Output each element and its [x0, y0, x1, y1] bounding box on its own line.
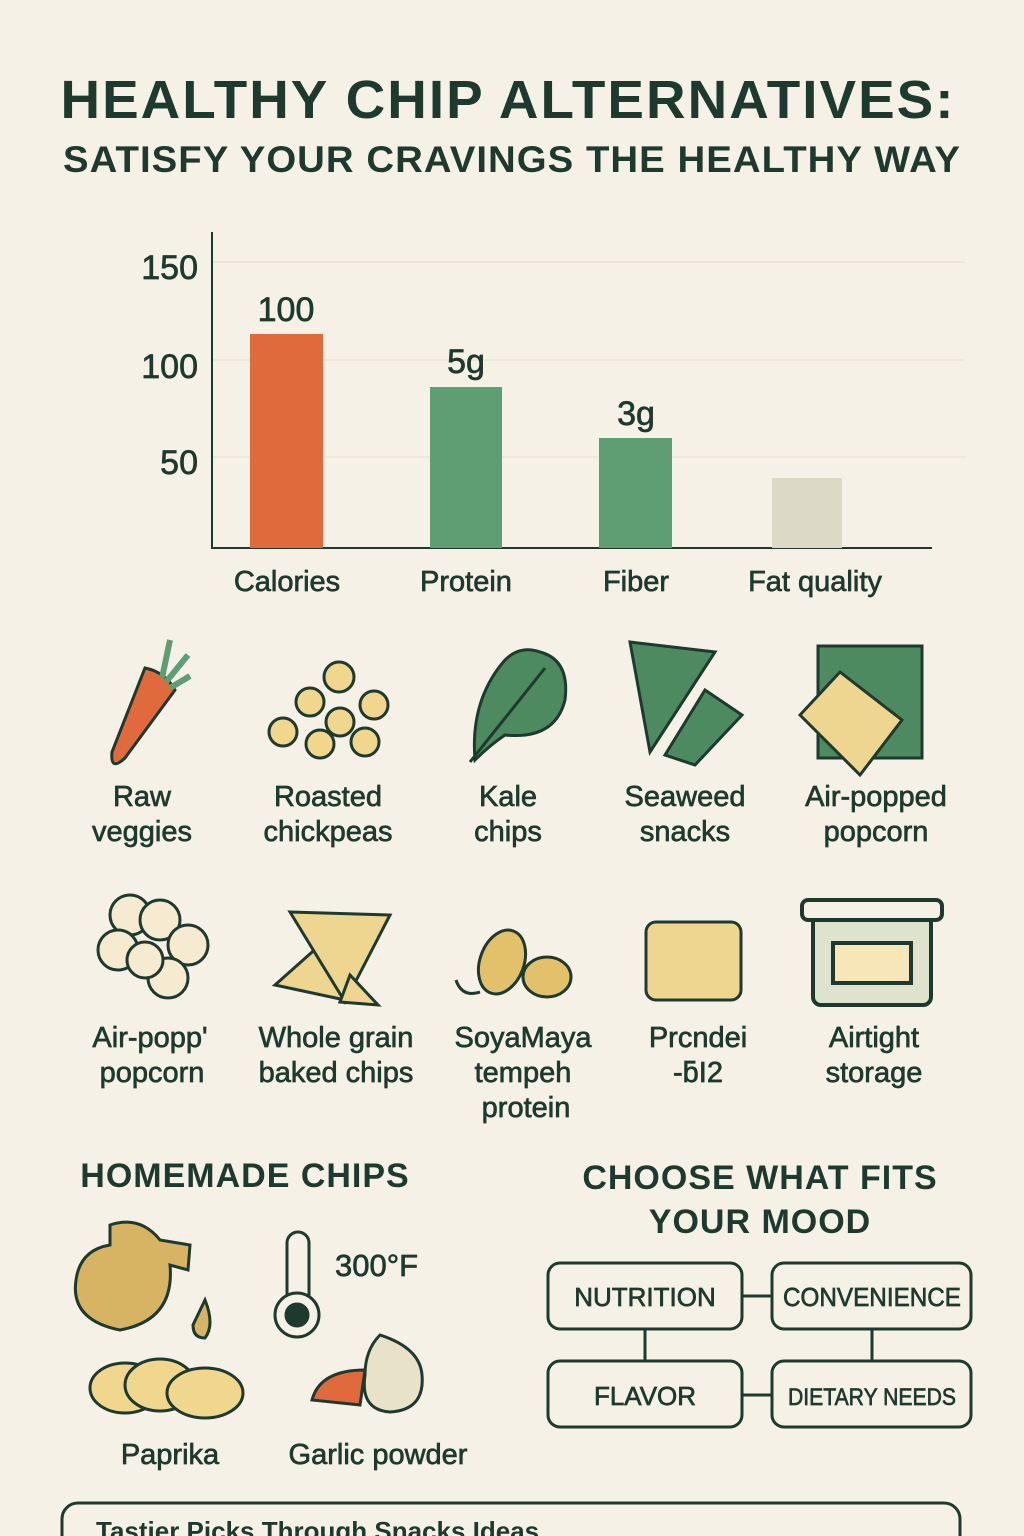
decision grid: FLAVOR — [594, 1381, 696, 1411]
labels row 1: veggies — [92, 816, 192, 848]
bar chart — [141, 232, 965, 598]
bar chart: Fat quality — [748, 566, 882, 598]
labels row 2 — [92, 1022, 922, 1124]
labels row 2: baked chips — [259, 1057, 413, 1089]
icon: oil jug — [75, 1222, 210, 1338]
bar chart: 100 — [258, 291, 314, 329]
title: HEALTHY CHIP ALTERNATIVES: — [60, 70, 956, 130]
labels row 2: Whole grain — [259, 1022, 413, 1054]
labels row 1: chickpeas — [264, 816, 392, 848]
decision grid: NUTRITION — [574, 1282, 716, 1312]
bar chart: Calories — [234, 566, 340, 598]
icon: popcorn cloud — [98, 895, 208, 998]
labels: spices — [121, 1439, 468, 1471]
labels row 2: Air-popp' — [92, 1022, 208, 1054]
icon: tempeh — [456, 923, 571, 1001]
decision grid: CONVENIENCE — [783, 1282, 961, 1312]
bar chart: 100 — [141, 348, 198, 386]
bar chart: Protein — [420, 566, 512, 598]
labels row 1: popcorn — [824, 816, 928, 848]
icon: garlic and pepper — [312, 1335, 422, 1412]
labels row 1: Air-popped — [805, 781, 947, 813]
labels row 2: protein — [482, 1092, 570, 1124]
labels: spices: Paprika — [121, 1439, 220, 1471]
labels row 2: Prcndei — [649, 1022, 747, 1054]
labels row 1: Raw — [113, 781, 172, 813]
labels row 2: popcorn — [100, 1057, 204, 1089]
bar chart: 5g — [447, 343, 485, 381]
labels row 1: Seaweed — [625, 781, 745, 813]
icon: carrot — [112, 640, 190, 764]
bar chart: Fiber — [603, 566, 669, 598]
labels row 1: chips — [474, 816, 542, 848]
icon: popcorn square — [800, 646, 922, 775]
heading: homemade chips: HOMEMADE CHIPS — [80, 1157, 410, 1195]
icon: cracker — [646, 922, 741, 1000]
icon: seaweed — [630, 642, 742, 765]
labels: spices: Garlic powder — [289, 1439, 468, 1471]
decision grid: DIETARY NEEDS — [788, 1384, 956, 1411]
labels row 1 — [92, 781, 947, 848]
decision grid — [548, 1263, 971, 1427]
icon: chickpeas — [269, 662, 388, 758]
labels row 2: -ƃI2 — [673, 1057, 723, 1089]
labels row 1: snacks — [640, 816, 730, 848]
labels row 2: SoyaMaya — [454, 1022, 592, 1054]
labels row 2: tempeh — [475, 1057, 571, 1089]
labels row 1: Kale — [479, 781, 537, 813]
heading: choose mood: YOUR MOOD — [649, 1203, 871, 1241]
title: SATISFY YOUR CRAVINGS THE HEALTHY WAY — [63, 139, 961, 180]
icon: thermometer — [275, 1232, 319, 1337]
labels row 2: storage — [826, 1057, 922, 1089]
icon: baked chips — [275, 912, 390, 1005]
heading: choose mood — [582, 1159, 938, 1241]
bar chart: 50 — [160, 444, 198, 482]
title — [60, 70, 961, 180]
labels row 1: Roasted — [274, 781, 382, 813]
icon: kale — [470, 650, 566, 762]
text: temperature: 300°F — [335, 1248, 418, 1283]
bottom panel — [62, 1503, 960, 1536]
bar chart: 3g — [617, 395, 655, 433]
icon: potatoes — [90, 1359, 243, 1418]
bar chart: 150 — [141, 249, 198, 287]
labels row 2: Airtight — [829, 1022, 919, 1054]
icon: storage container — [802, 900, 942, 1005]
heading: choose mood: CHOOSE WHAT FITS — [582, 1159, 938, 1197]
